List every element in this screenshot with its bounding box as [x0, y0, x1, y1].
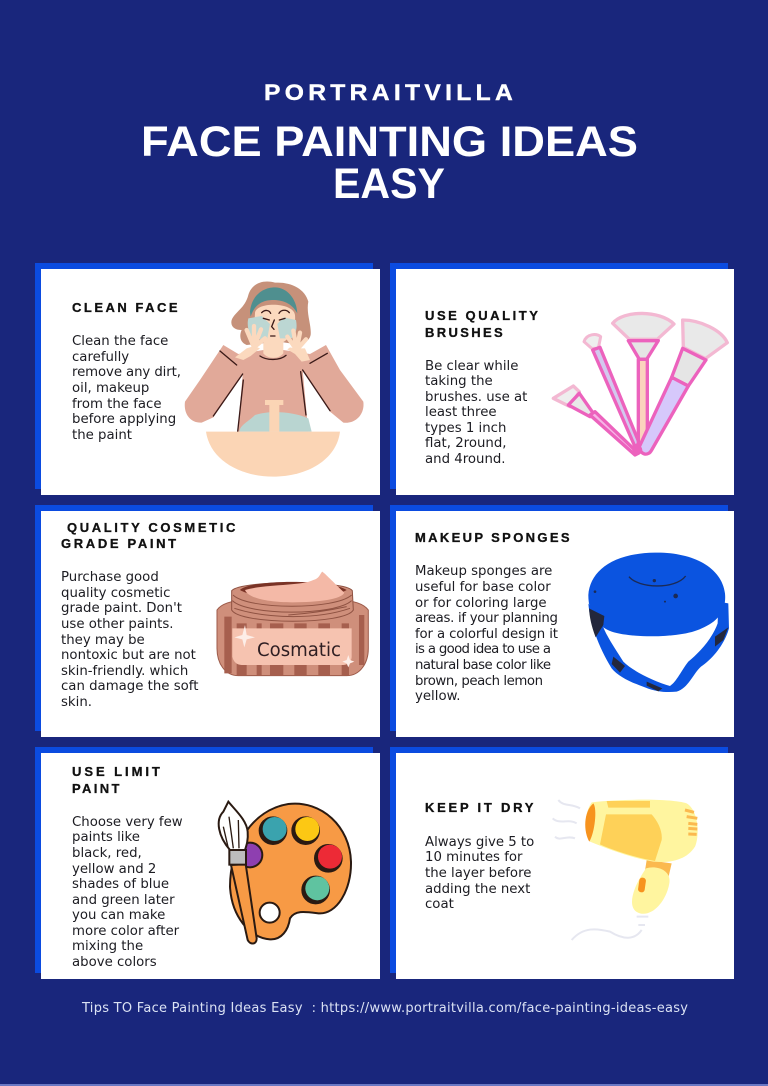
text: clean face: carefully	[72, 350, 129, 365]
text: sponges: Makeup sponges are	[415, 564, 552, 579]
header	[141, 80, 638, 208]
text: cosmetic paint: grade paint. Don't	[61, 601, 182, 616]
heading: use quality brushes: USE QUALITY	[425, 308, 540, 323]
text: limit paint: above colors	[72, 955, 157, 970]
text: limit paint: black, red,	[72, 846, 142, 861]
heading: use limit paint	[72, 764, 163, 796]
text: sponges: useful for base color	[415, 580, 551, 595]
text: keep it dry: coat	[425, 897, 454, 912]
text: clean face: remove any dirt,	[72, 365, 181, 380]
panel: cosmetic paint	[35, 505, 380, 737]
icon: hair dryer	[553, 800, 698, 940]
text: keep it dry: 10 minutes for	[425, 850, 523, 865]
text: sponges	[415, 564, 558, 704]
icon: paint palette	[219, 802, 351, 944]
heading: makeup sponges: MAKEUP SPONGES	[415, 530, 572, 545]
footer link: Tips TO Face Painting Ideas Easy : https://www.portraitvilla.com/face-painting-ideas-easy	[81, 1001, 688, 1016]
text: cosmetic paint: they may be	[61, 633, 145, 648]
text: sponges: areas. if your planning	[415, 611, 558, 626]
heading: use quality brushes: BRUSHES	[425, 325, 505, 340]
text: cosmetic paint	[61, 570, 198, 710]
heading: quality cosmetic grade paint: QUALITY COSMETIC	[67, 520, 238, 535]
text: keep it dry: the layer before	[425, 866, 531, 881]
text: sponges: natural base color like	[415, 658, 551, 673]
icon: woman washing face	[185, 282, 364, 477]
text: brushes: taking the	[425, 374, 493, 389]
text: keep it dry: Always give 5 to	[425, 835, 534, 850]
label: cosmatic: Cosmatic	[257, 640, 341, 661]
text: keep it dry	[425, 835, 534, 912]
text: sponges: is a good idea to use a	[415, 642, 551, 657]
panel: keep it dry	[390, 747, 734, 979]
icon: makeup sponge	[588, 553, 729, 692]
text: brushes: brushes. use at	[425, 390, 527, 405]
text: clean face: oil, makeup	[72, 381, 149, 396]
text: clean face	[72, 334, 181, 443]
title line 2: EASY	[333, 160, 445, 208]
text: cosmetic paint: use other paints.	[61, 617, 174, 632]
panel: limit paint	[35, 747, 380, 979]
title: FACE PAINTING IDEAS	[141, 118, 638, 166]
text: cosmetic paint: skin.	[61, 695, 92, 710]
heading: use quality brushes	[425, 308, 540, 340]
text: cosmetic paint: quality cosmetic	[61, 586, 170, 601]
text: limit paint: more color after	[72, 924, 180, 939]
text: brushes: least three	[425, 405, 497, 420]
heading: keep it dry: KEEP IT DRY	[425, 800, 536, 815]
text: limit paint: paints like	[72, 830, 140, 845]
text: cosmetic paint: can damage the soft	[61, 679, 198, 694]
text: brushes: Be clear while	[425, 359, 518, 374]
text: clean face: the paint	[72, 428, 132, 443]
text: cosmetic paint: skin-friendly. which	[61, 664, 188, 679]
heading: use limit paint: USE LIMIT	[72, 764, 163, 779]
text: brushes: types 1 inch	[425, 421, 506, 436]
text: sponges: or for coloring large	[415, 596, 547, 611]
text: keep it dry: adding the next	[425, 882, 530, 897]
panel: clean face	[35, 263, 380, 495]
panel: quality brushes	[390, 263, 734, 495]
text: limit paint: shades of blue	[72, 877, 169, 892]
heading: clean face: CLEAN FACE	[72, 300, 180, 315]
text: cosmetic paint: nontoxic but are not	[61, 648, 196, 663]
text: brushes: and 4round.	[425, 452, 506, 467]
icon: cosmetic jar	[217, 572, 368, 676]
text: cosmetic paint: Purchase good	[61, 570, 159, 585]
text: limit paint: mixing the	[72, 939, 143, 954]
text: brushes	[425, 359, 527, 467]
heading: quality cosmetic grade paint: GRADE PAINT	[61, 536, 179, 551]
text: clean face: before applying	[72, 412, 176, 427]
text: limit paint: Choose very few	[72, 815, 183, 830]
text: sponges: brown, peach lemon	[415, 674, 543, 689]
text: limit paint	[72, 815, 183, 970]
text: clean face: Clean the face	[72, 334, 168, 349]
text: limit paint: and green later	[72, 893, 175, 908]
brand name: PORTRAITVILLA	[264, 80, 517, 105]
text: sponges: for a colorful design it	[415, 627, 558, 642]
panel: makeup sponges	[390, 505, 734, 737]
text: clean face: from the face	[72, 397, 162, 412]
text: brushes: flat, 2round,	[425, 436, 506, 451]
text: limit paint: you can make	[72, 908, 165, 923]
heading: use limit paint: PAINT	[72, 781, 122, 796]
text: sponges: yellow.	[415, 689, 460, 704]
icon: makeup brushes	[553, 313, 727, 455]
text: limit paint: yellow and 2	[72, 862, 156, 877]
heading: quality cosmetic grade paint	[61, 520, 238, 551]
